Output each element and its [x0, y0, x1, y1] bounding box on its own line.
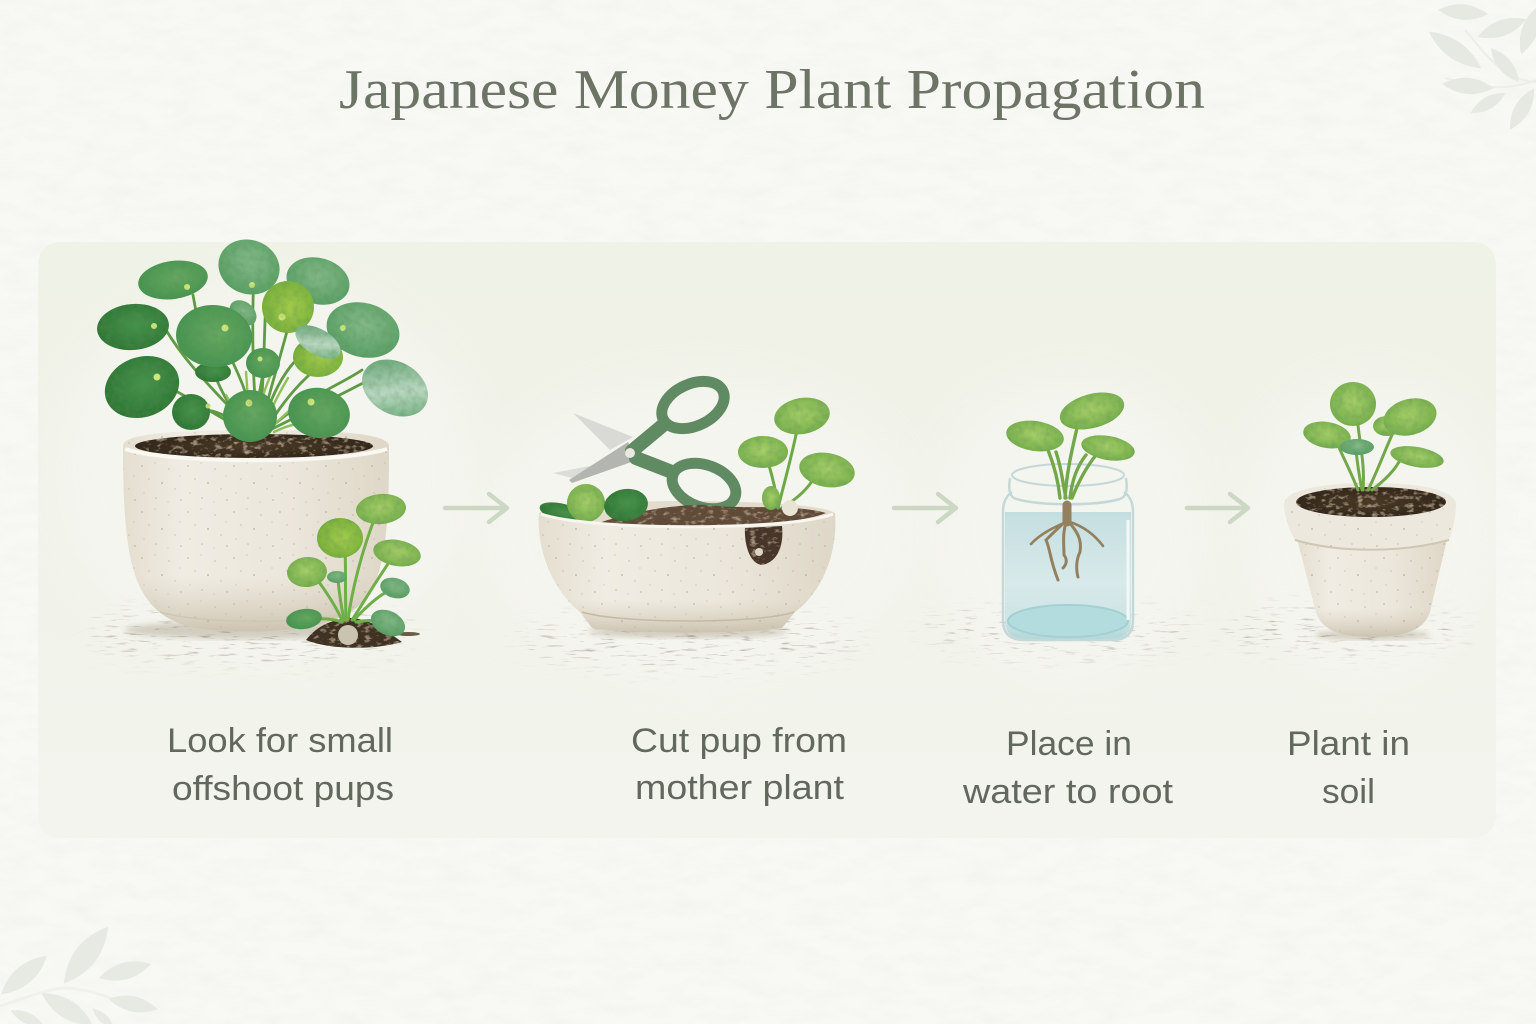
jar water	[1005, 512, 1131, 639]
caption: step 2: mother plant	[635, 769, 845, 807]
corner foliage: bottom left	[0, 920, 159, 1024]
scissors	[553, 372, 742, 517]
young plant stems	[1338, 425, 1400, 490]
bowl body	[539, 513, 835, 638]
title: Japanese Money Plant Propagation	[339, 59, 1205, 121]
step 1: mother plant in large pot	[95, 231, 438, 648]
small pot	[1284, 483, 1456, 640]
caption: step 1	[167, 722, 394, 808]
caption: step 3: Place in	[1006, 725, 1132, 763]
mother plant stem cluster	[226, 372, 302, 432]
arrow 2	[894, 494, 956, 522]
large cream pot	[123, 430, 389, 639]
mother plant leaves	[95, 231, 438, 443]
cutting leaves	[1004, 386, 1137, 465]
caption: step 1: offshoot pups	[172, 770, 394, 808]
caption: step 2: Cut pup from	[631, 722, 847, 760]
soil in bowl	[592, 505, 826, 528]
cut pup leaves on left	[537, 479, 650, 528]
pup offshoot with soil mound	[285, 492, 423, 648]
panel: steps background	[38, 242, 1496, 838]
caption: step 1: Look for small	[167, 722, 393, 760]
caption: step 2	[631, 722, 847, 807]
young plant leaves	[1301, 382, 1445, 472]
bowl back rim	[539, 501, 835, 527]
cutting stems	[1048, 428, 1096, 498]
caption: step 4	[1287, 725, 1410, 811]
arrow 1	[445, 494, 507, 522]
caption: step 4: soil	[1322, 773, 1375, 811]
surface glow and soil flecks under plants	[55, 280, 1500, 680]
pup with three leaves in bowl	[738, 393, 858, 516]
caption: step 3	[962, 725, 1174, 811]
step 2: scissors and pup in bowl	[537, 372, 858, 638]
mother plant stems	[166, 268, 365, 432]
step 3: cutting in glass jar	[1003, 386, 1137, 640]
caption: step 3: water to root	[962, 773, 1174, 811]
caption: step 4: Plant in	[1287, 725, 1410, 763]
step 4: young plant in small pot	[1284, 382, 1456, 640]
arrow 3	[1187, 494, 1248, 522]
corner foliage: top right	[1424, 2, 1536, 134]
roots	[1031, 505, 1103, 580]
jar glass	[1003, 464, 1133, 640]
